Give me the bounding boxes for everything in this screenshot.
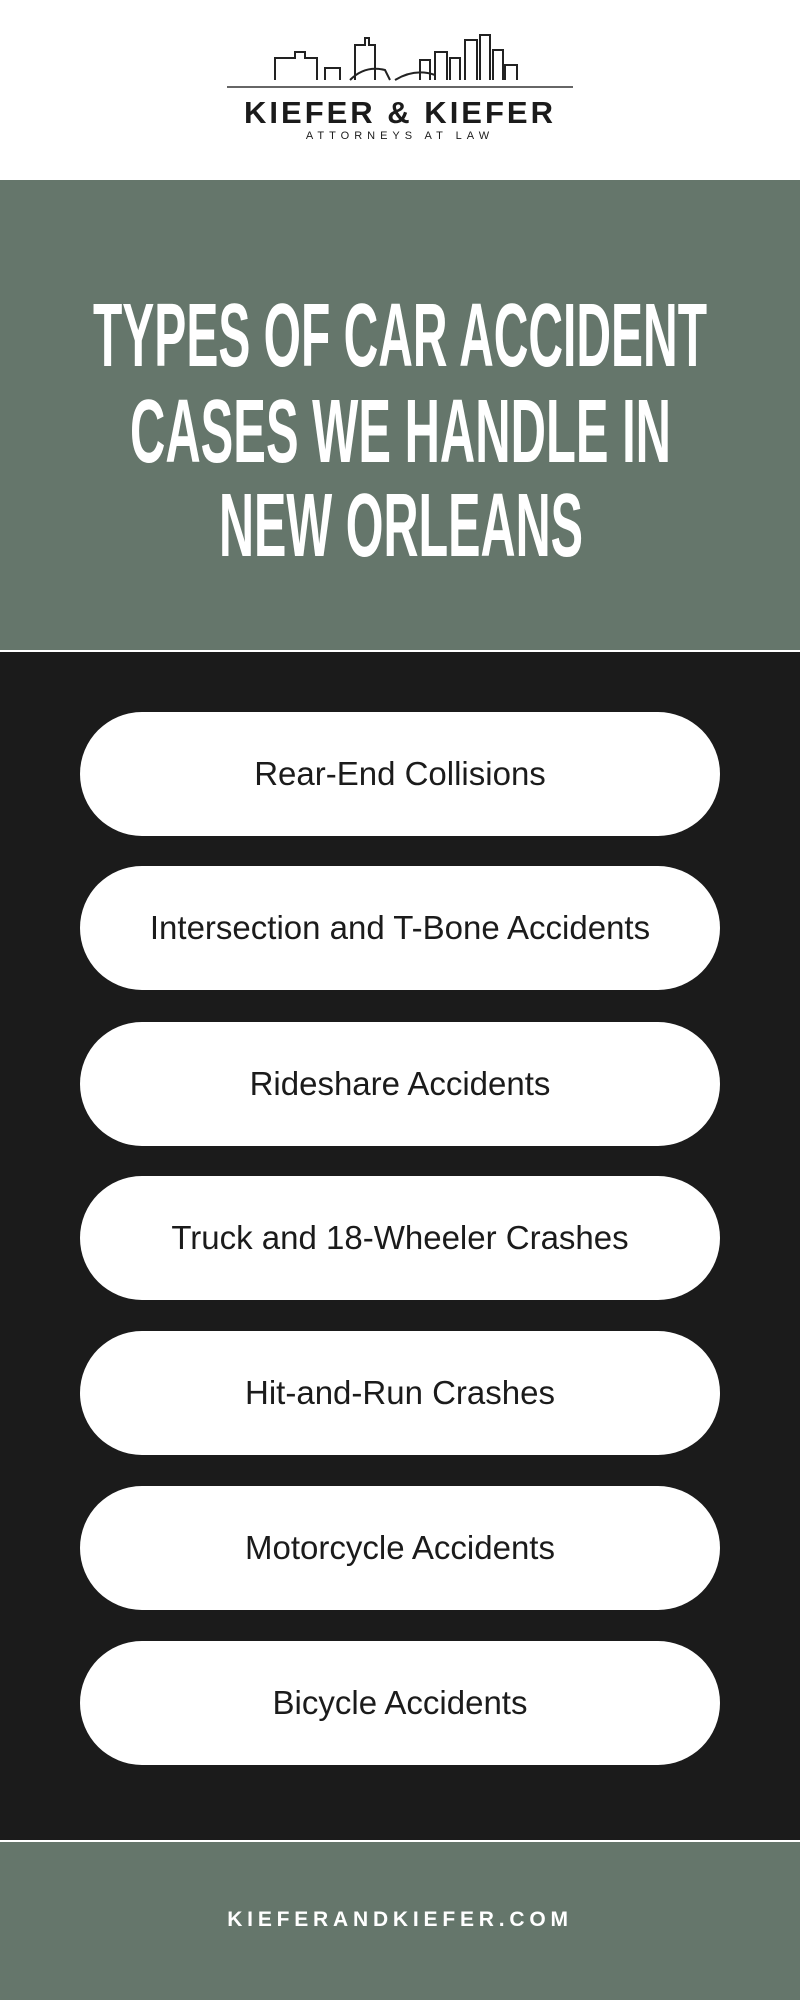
pill: rear-end [80,712,720,836]
footer url: KIEFERANDKIEFER.COM [227,1908,573,1931]
pill: rideshare: Rideshare Accidents [250,1065,550,1102]
logo [227,34,573,142]
pill: bicycle [80,1641,720,1765]
pill: intersection: Intersection and T-Bone Accidents [150,909,650,946]
pill: truck [80,1176,720,1300]
pill: hit-and-run [80,1331,720,1455]
title [93,286,707,576]
pill: motorcycle [80,1486,720,1610]
pill: rear-end: Rear-End Collisions [254,755,546,792]
pill: motorcycle: Motorcycle Accidents [245,1529,555,1566]
logo text: KIEFER & KIEFER [244,95,556,130]
logo tagline: ATTORNEYS AT LAW [306,130,494,142]
pill: hit-and-run: Hit-and-Run Crashes [245,1374,555,1411]
footer [0,1842,800,2000]
header [0,0,800,180]
pill: bicycle: Bicycle Accidents [273,1684,527,1721]
title panel [0,180,800,650]
icon: skyline [227,34,573,88]
pill: truck: Truck and 18-Wheeler Crashes [171,1219,629,1256]
list panel [80,712,720,1765]
pill: intersection [80,866,720,990]
pill: rideshare [80,1022,720,1146]
